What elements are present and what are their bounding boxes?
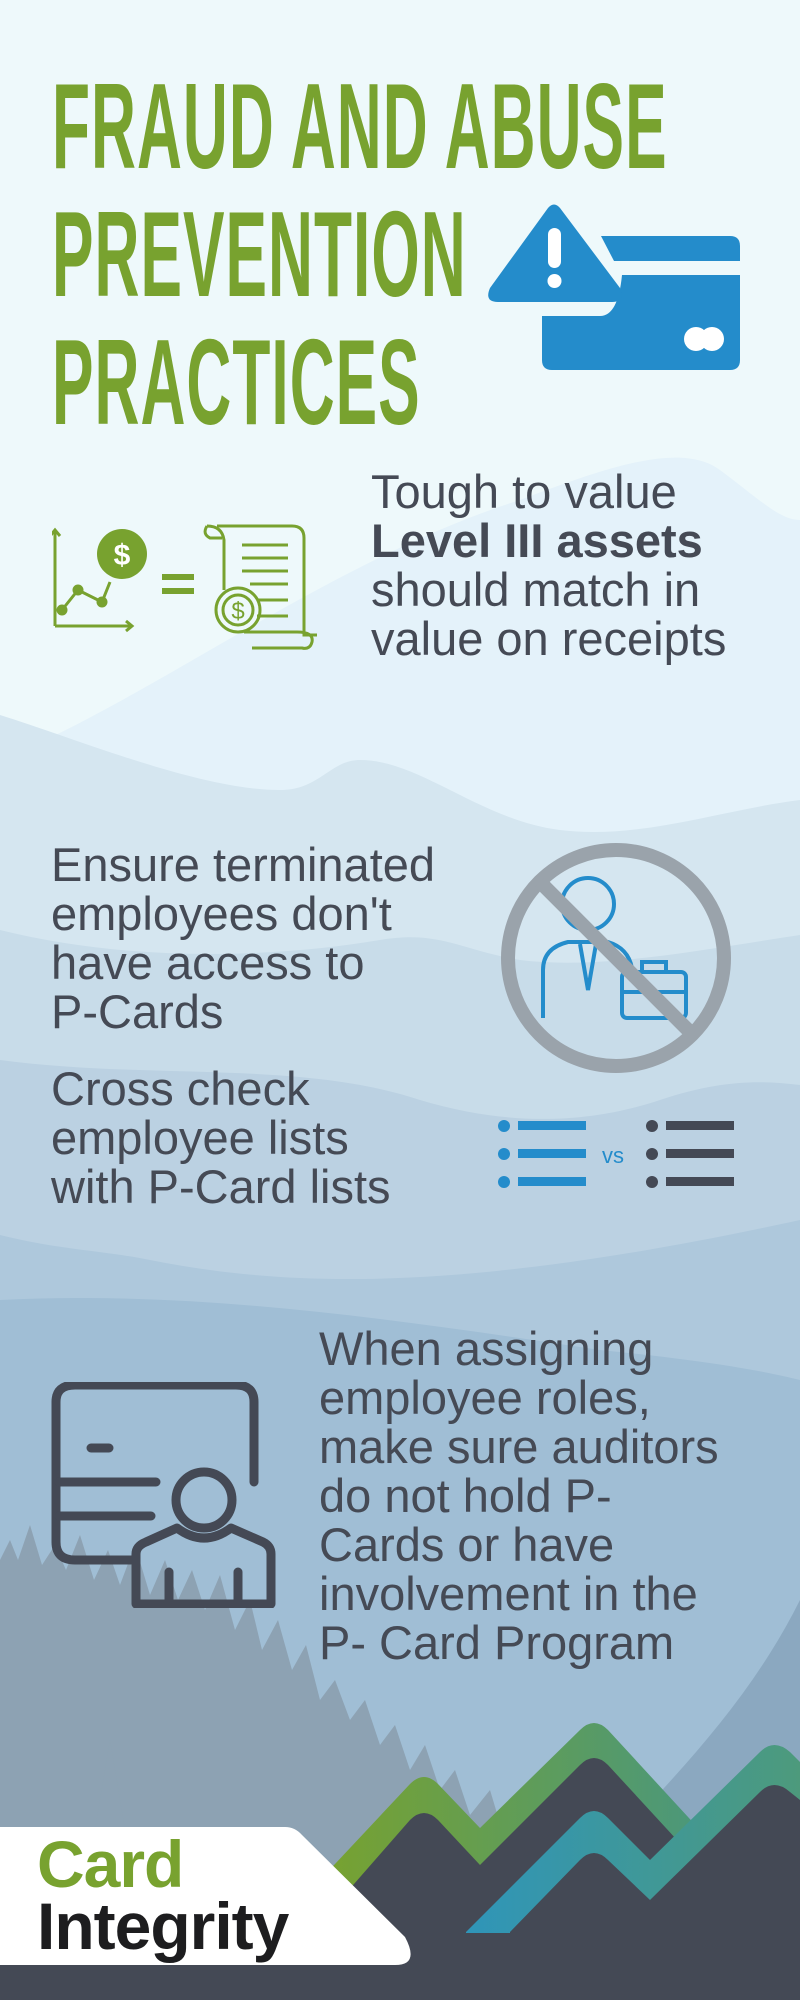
text: terminated employees: have access to — [51, 936, 365, 989]
text: auditors: do not hold P- — [319, 1469, 612, 1522]
text: terminated employees — [51, 838, 435, 1038]
icon: list vs list — [498, 1120, 734, 1188]
title — [52, 58, 668, 450]
icon: chart equals receipt: $ — [231, 598, 245, 625]
text: terminated employees: employees don't — [51, 887, 392, 940]
text: auditors — [319, 1322, 719, 1669]
title: PREVENTION — [52, 186, 467, 322]
text: auditors: P- Card Program — [319, 1616, 674, 1669]
icon: list vs list: vs — [602, 1143, 624, 1168]
text: auditors: employee roles, — [319, 1371, 651, 1424]
text: cross check: employee lists — [51, 1111, 349, 1164]
text: auditors: involvement in the — [319, 1567, 698, 1620]
logo text: Card — [37, 1827, 183, 1901]
text: terminated employees: Ensure terminated — [51, 838, 435, 891]
icon: chart equals receipt — [52, 524, 317, 650]
text: level III assets — [371, 465, 726, 665]
text: cross check — [51, 1062, 391, 1213]
icon: no employee — [501, 843, 731, 1073]
text: auditors: When assigning — [319, 1322, 653, 1375]
text: auditors: make sure auditors — [319, 1420, 719, 1473]
logo text: Integrity — [37, 1889, 288, 1963]
text: level III assets: value on receipts — [371, 612, 726, 665]
text: auditors: Cards or have — [319, 1518, 614, 1571]
title: PRACTICES — [52, 314, 421, 450]
icon: warning card — [488, 204, 740, 370]
logo box — [0, 1827, 411, 1965]
icon: chart equals receipt: $ — [114, 539, 131, 572]
title: FRAUD AND ABUSE — [52, 58, 668, 194]
text: terminated employees: P-Cards — [51, 985, 223, 1038]
icon: card with person — [52, 1382, 276, 1608]
trees — [0, 1525, 560, 2000]
mountains footer — [0, 1723, 800, 2000]
logo text — [37, 1827, 289, 1963]
text: cross check: Cross check — [51, 1062, 310, 1115]
text: level III assets: Tough to value — [371, 465, 677, 518]
text: level III assets: should match in — [371, 563, 700, 616]
text: cross check: with P-Card lists — [51, 1160, 391, 1213]
text: level III assets: Level III assets — [371, 514, 703, 567]
